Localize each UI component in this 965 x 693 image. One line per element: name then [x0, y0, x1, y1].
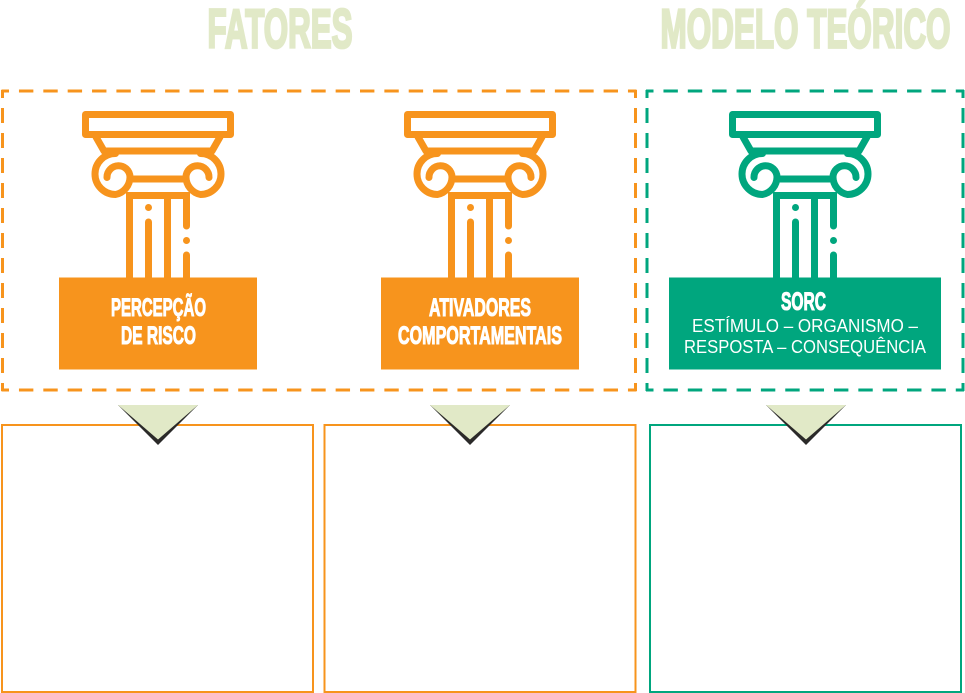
icon: green column, SORC: [732, 114, 878, 280]
label box: percepção de risco: [59, 278, 257, 370]
panel: fatores dashed frame: [2, 90, 636, 391]
icon: orange column, percepção de risco: [86, 114, 230, 280]
label box: SORC: SORC: [781, 288, 826, 316]
empty box: ativadores comportamentais: [324, 425, 636, 692]
label box: ativadores comportamentais: COMPORTAMENTAIS: [398, 322, 562, 350]
label box: percepção de risco: DE RISCO: [121, 322, 196, 350]
label box: ativadores comportamentais: ATIVADORES: [429, 294, 531, 322]
label box: SORC: ESTÍMULO – ORGANISMO –: [692, 316, 918, 336]
empty box: percepção de risco: [2, 425, 313, 692]
panel: modelo teórico dashed frame: [646, 90, 964, 391]
arrow: down triangle 3: [766, 405, 846, 445]
icon: orange column, ativadores comportamentais: [408, 114, 552, 280]
arrow: down triangle 1: [118, 405, 198, 445]
arrow: down triangle 2: [430, 405, 510, 445]
label box: ativadores comportamentais: [381, 278, 579, 370]
label box: SORC: RESPOSTA – CONSEQUÊNCIA: [684, 337, 926, 357]
label box: SORC: [669, 278, 941, 370]
label box: percepção de risco: PERCEPÇÃO: [111, 292, 206, 322]
empty box: SORC: [650, 425, 961, 692]
